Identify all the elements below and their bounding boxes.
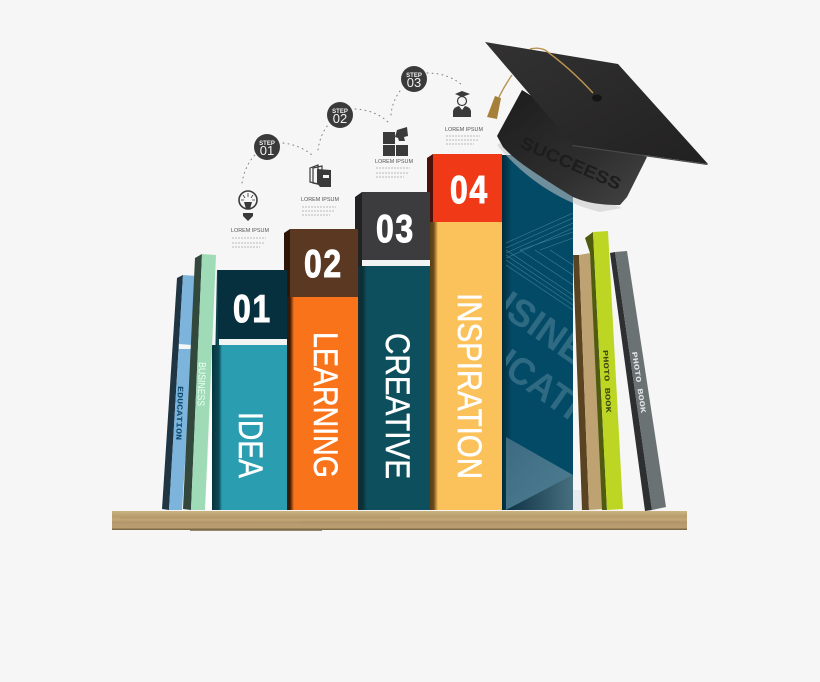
text block: lorem 3: LOREM IPSUM (375, 159, 413, 165)
text block: lorem 1: LOREM IPSUM (231, 228, 269, 234)
cap crown (497, 90, 647, 205)
book 03: creative (355, 192, 430, 510)
icon: books (310, 165, 331, 187)
book: green photo book (585, 231, 623, 510)
step 01 badge: 01 (260, 143, 274, 158)
book: grey photo book (610, 251, 666, 511)
cap text: SUCCEESS (517, 133, 624, 194)
text block: lorem 3 (375, 159, 413, 177)
graduation cap (485, 42, 708, 212)
text block: lorem 2: LOREM IPSUM (301, 197, 339, 203)
book: grey photo book: PHOTO BOOK (629, 351, 646, 414)
book 01: idea (212, 270, 287, 510)
tassel (487, 75, 512, 119)
text block: lorem 2 (301, 197, 339, 215)
cord (530, 48, 593, 93)
book: business (183, 254, 216, 510)
step 03 badge (401, 66, 427, 92)
book: green photo book: PHOTO BOOK (600, 350, 611, 414)
step 01 badge (254, 134, 280, 160)
cap shadow (497, 140, 622, 212)
cap board (485, 42, 708, 164)
label idea: IDEA (231, 412, 269, 478)
shelf (112, 511, 687, 531)
step 03 badge: 03 (407, 75, 421, 90)
icon: puzzle (383, 127, 408, 156)
label learning: LEARNING (306, 332, 344, 478)
number 04: 04 (450, 168, 489, 212)
step 02 badge: 02 (333, 111, 347, 126)
big book: business education: EDUCATION (436, 304, 632, 459)
cover title: BUSINESS (455, 259, 635, 402)
number 01: 01 (233, 287, 272, 331)
icon: light bulb (239, 191, 257, 221)
step 02 badge: STEP (332, 109, 348, 115)
cover line pattern (506, 213, 573, 310)
book 04: inspiration (427, 154, 502, 510)
icon: graduate (453, 91, 471, 117)
book 02: learning (284, 229, 358, 510)
label inspiration: INSPIRATION (450, 293, 488, 479)
step path (242, 73, 462, 183)
number 02: 02 (304, 242, 343, 286)
book: education: EDUCATION (173, 386, 184, 440)
number 03: 03 (376, 207, 415, 251)
text block: lorem 4: LOREM IPSUM (445, 127, 483, 133)
step 01 badge: STEP (259, 141, 275, 147)
button (592, 94, 602, 102)
text block: lorem 4 (445, 127, 483, 144)
big book: business education (502, 155, 573, 510)
book: business: BUSINESS (194, 362, 207, 407)
cover triangles (506, 437, 573, 510)
book: plain tan (573, 253, 603, 510)
step 02 badge (327, 102, 353, 128)
text block: lorem 1 (231, 228, 269, 247)
book: education (162, 275, 197, 510)
label creative: CREATIVE (378, 333, 416, 479)
step 03 badge: STEP (406, 73, 422, 79)
